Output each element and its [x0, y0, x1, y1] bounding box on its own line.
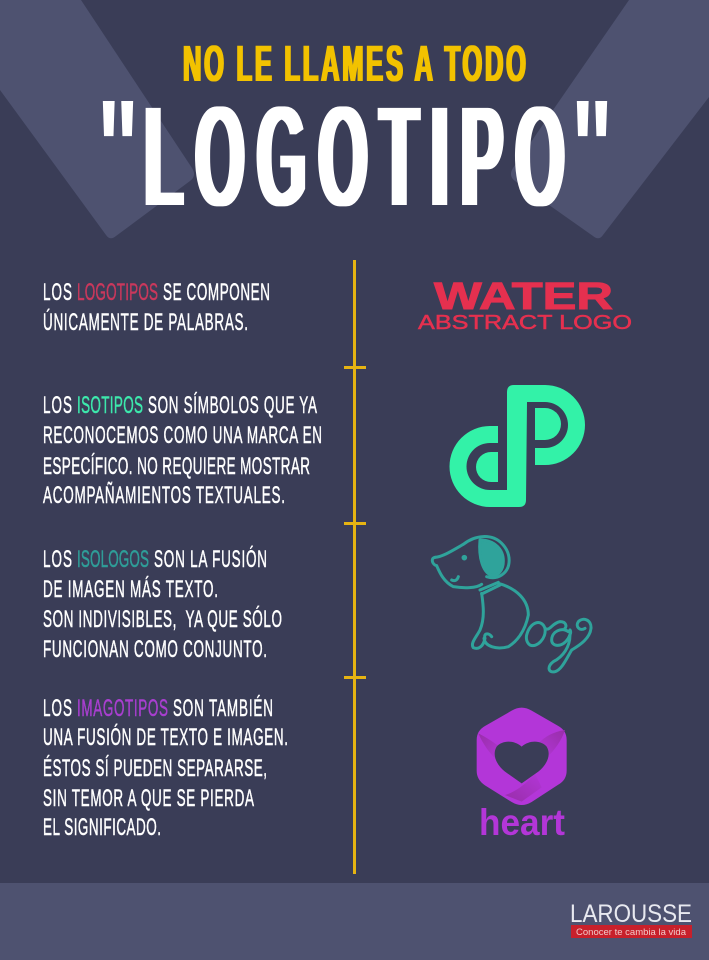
text block: isologos: SON LA FUSIÓN [154, 545, 267, 573]
text block: isologos: FUNCIONAN COMO CONJUNTO. [43, 636, 267, 663]
title: main word: " [97, 70, 139, 228]
text block: imagotipos: EL SIGNIFICADO. [43, 814, 161, 841]
text block: isotipos [43, 391, 322, 509]
text block: imagotipos: IMAGOTIPOS [77, 695, 168, 722]
text block: isologos [43, 545, 282, 663]
text block: isotipos: ESPECÍFICO. NO REQUIERE MOSTRAR [43, 452, 310, 480]
logo: water abstract: WATER [434, 276, 613, 318]
text block: imagotipos: SIN TEMOR A QUE SE PIERDA [43, 785, 255, 812]
timeline [344, 260, 366, 874]
brand: larousse [570, 900, 692, 938]
logo: dog isologo [432, 537, 591, 672]
text block: logotipos: LOGOTIPOS [77, 279, 158, 306]
text block: logotipos: ÚNICAMENTE DE PALABRAS. [43, 308, 248, 336]
logo: water abstract [418, 276, 632, 334]
title: main word: " [571, 70, 613, 228]
text block: isologos: DE IMAGEN MÁS TEXTO. [43, 575, 218, 603]
text block: imagotipos: UNA FUSIÓN DE TEXTO E IMAGEN. [43, 723, 288, 751]
background band: right [511, 0, 709, 238]
logo: isotipo dp [450, 385, 585, 507]
text block: isologos: SON INDIVISIBLES, YA QUE SÓLO [43, 605, 282, 633]
brand: larousse: Conocer te cambia la vida [576, 927, 687, 938]
title: kicker: NO LE LLAMES A TODO [183, 35, 526, 92]
background band: left [0, 0, 194, 238]
text block: imagotipos [43, 694, 288, 841]
text block: isotipos: SON SÍMBOLOS QUE YA [148, 391, 318, 419]
logo: water abstract: ABSTRACT LOGO [418, 312, 632, 334]
text block: isotipos: LOS [43, 392, 72, 419]
text block: imagotipos: SON TAMBIÉN [173, 694, 273, 722]
text block: imagotipos: LOS [43, 695, 72, 722]
text block: logotipos [43, 279, 270, 336]
text block: isotipos: ISOTIPOS [77, 392, 143, 419]
footer band [0, 883, 709, 960]
text block: isotipos: RECONOCEMOS COMO UNA MARCA EN [43, 422, 322, 449]
text block: isologos: ISOLOGOS [77, 546, 149, 573]
brand: larousse: LAROUSSE [570, 900, 692, 928]
text block: logotipos: SE COMPONEN [163, 279, 270, 306]
title: main word: LOGOTIPO [144, 74, 565, 238]
text block: isologos: LOS [43, 546, 72, 573]
text block: imagotipos: ÉSTOS SÍ PUEDEN SEPARARSE, [43, 754, 267, 782]
logo: heart imagotipo: heart [479, 802, 565, 843]
logo: heart imagotipo [477, 708, 567, 843]
text block: logotipos: LOS [43, 279, 72, 306]
text block: isotipos: ACOMPAÑAMIENTOS TEXTUALES. [43, 479, 285, 509]
